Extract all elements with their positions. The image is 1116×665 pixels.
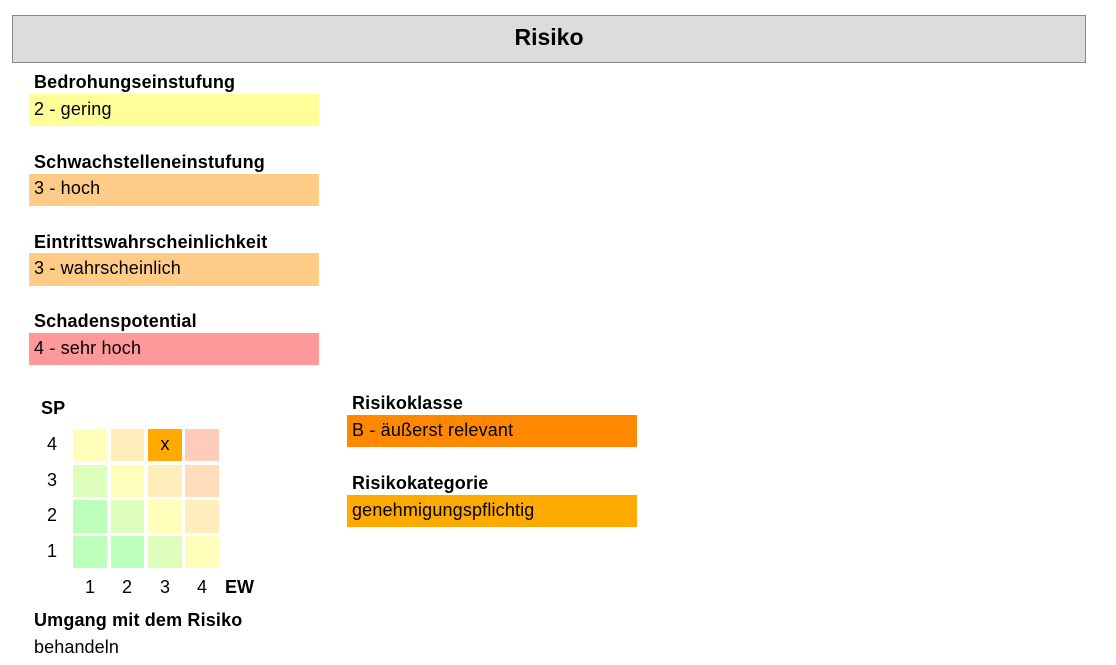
matrix cells: x	[160, 434, 170, 454]
label: Bedrohungseinstufung	[34, 72, 235, 92]
label: Schwachstelleneinstufung	[34, 152, 265, 172]
label: Risikoklasse	[352, 393, 463, 413]
row labels: 2	[47, 505, 57, 525]
column labels: 3	[160, 577, 170, 597]
row labels: 4	[47, 434, 57, 454]
panel: Schwachstelleneinstufung	[29, 152, 319, 206]
value: behandeln	[34, 637, 119, 657]
value: genehmigungspflichtig	[352, 500, 534, 520]
panel: Schadenspotential	[29, 311, 319, 365]
label: Risikokategorie	[352, 473, 488, 493]
column labels: 1	[85, 577, 95, 597]
column labels: 2	[122, 577, 132, 597]
row labels: 1	[47, 541, 57, 561]
value: B - äußerst relevant	[352, 420, 513, 440]
column labels: 4	[197, 577, 207, 597]
panel: Bedrohungseinstufung	[29, 72, 319, 126]
value: 3 - hoch	[34, 178, 100, 198]
value	[29, 333, 319, 365]
value	[29, 174, 319, 206]
value	[347, 415, 637, 447]
value: 2 - gering	[34, 99, 112, 119]
panel: Eintrittswahrscheinlichkeit	[29, 232, 319, 286]
value	[347, 495, 637, 527]
value: 4 - sehr hoch	[34, 338, 141, 358]
value	[29, 253, 319, 286]
column labels	[85, 577, 254, 597]
label: Schadenspotential	[34, 311, 197, 331]
axis label: EW: EW	[225, 577, 254, 597]
axis label: SP: SP	[41, 398, 65, 418]
matrix cells	[73, 429, 219, 568]
label: Umgang mit dem Risiko	[34, 610, 242, 630]
risk matrix	[41, 398, 254, 597]
title	[12, 15, 1086, 63]
panel: Risikoklasse	[347, 393, 637, 447]
value: 3 - wahrscheinlich	[34, 258, 181, 278]
value	[29, 94, 319, 126]
label: Eintrittswahrscheinlichkeit	[34, 232, 267, 252]
row labels	[47, 434, 57, 561]
panel: Risikokategorie	[347, 473, 637, 527]
panel: Umgang mit dem Risiko	[34, 610, 242, 657]
row labels: 3	[47, 470, 57, 490]
title: Risiko	[514, 24, 584, 50]
